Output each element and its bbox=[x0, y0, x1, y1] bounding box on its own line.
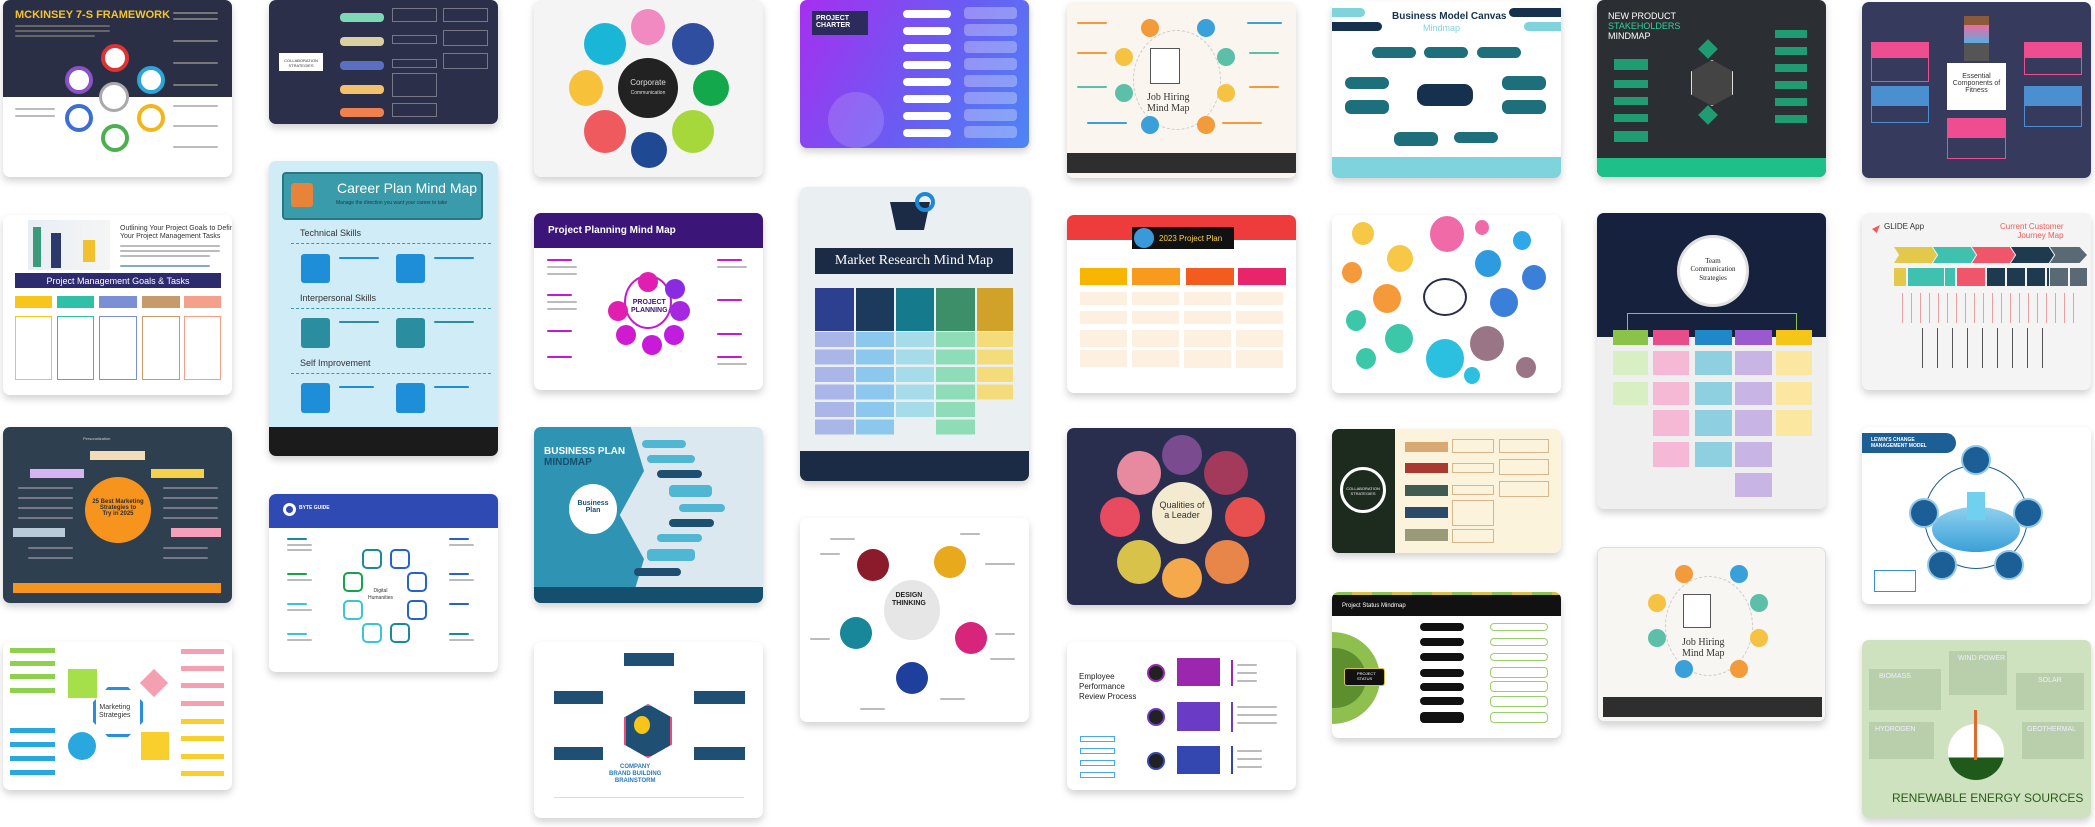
title bbox=[1608, 11, 1680, 41]
hex icons bbox=[362, 549, 382, 569]
card: Job hiring mind map bbox=[1067, 2, 1296, 178]
title bbox=[892, 592, 926, 607]
card: Business plan mindmap: Business bbox=[577, 500, 609, 507]
card: Byte guide digital humanities: BYTE GUIDE bbox=[299, 505, 330, 511]
title: THINKING bbox=[892, 600, 926, 607]
title: Job Hiring bbox=[1682, 637, 1724, 648]
title: Business Model Canvas bbox=[1392, 11, 1506, 22]
card: Project management goals bbox=[3, 215, 232, 395]
title bbox=[609, 764, 661, 784]
card: Renewable energy sources: WIND POWER bbox=[1958, 655, 2005, 662]
card: Career plan mind map: Technical Skills bbox=[300, 228, 361, 238]
center box bbox=[1947, 63, 2006, 110]
center circle bbox=[1423, 278, 1467, 316]
center circle: a Leader bbox=[1164, 510, 1200, 520]
card: Renewable energy sources: SOLAR bbox=[2038, 677, 2062, 684]
center label bbox=[99, 704, 131, 719]
card: Company brand building brainstorm bbox=[534, 642, 763, 818]
card: Renewable energy sources: BIOMASS bbox=[1879, 673, 1911, 680]
title: Mind Map bbox=[1147, 103, 1190, 114]
title: MINDMAP bbox=[1608, 31, 1650, 41]
card: Project charter bbox=[800, 0, 1029, 148]
title: Job Hiring bbox=[1147, 92, 1190, 103]
card: Employee performance review bbox=[1067, 642, 1296, 790]
card: Business plan mindmap bbox=[534, 427, 763, 603]
card: Market research mind map bbox=[800, 187, 1029, 481]
label boxes bbox=[90, 451, 145, 460]
card: Project status mindmap: STATUS bbox=[1357, 676, 1372, 681]
card: Collaboration strategies dark bbox=[269, 0, 498, 124]
center circle: Try in 2025 bbox=[102, 511, 134, 517]
card: Lewin's change management model: MANAGEMENT MODEL bbox=[1871, 443, 1927, 449]
card: Project status mindmap: PROJECT bbox=[1357, 671, 1376, 676]
card: Career plan mind map: Manage the direction you want your career to take bbox=[336, 200, 447, 206]
title: 2023 Project Plan bbox=[1159, 234, 1222, 243]
center box bbox=[279, 53, 323, 71]
card: Team communication strategies bbox=[1597, 213, 1826, 509]
center circle bbox=[1152, 482, 1212, 544]
banner bbox=[15, 273, 221, 288]
card: McKinsey 7-S framework bbox=[3, 0, 232, 177]
card: Marketing strategies 2025: Personalization bbox=[83, 436, 110, 441]
card: Employee performance review: Review Process bbox=[1079, 692, 1136, 701]
card: Lewin's change management model bbox=[1862, 427, 2091, 604]
center circle: Corporate bbox=[630, 78, 666, 87]
card: Customer journey map: Journey Map bbox=[2017, 231, 2064, 240]
card: Career plan mind map bbox=[269, 161, 498, 456]
banner bbox=[815, 248, 1013, 274]
title bbox=[812, 11, 868, 35]
center circle: Qualities of bbox=[1159, 500, 1205, 510]
title: PROJECT bbox=[816, 15, 849, 22]
center circle: Strategies to bbox=[100, 505, 136, 511]
title bbox=[1132, 227, 1234, 249]
card: Customer journey map bbox=[1862, 213, 2091, 390]
card: Byte guide digital humanities: Humanities bbox=[368, 594, 393, 600]
title: GLIDE App bbox=[1884, 222, 1924, 231]
center circle: 25 Best Marketing bbox=[92, 499, 144, 505]
card: Project planning mind map: PLANNING bbox=[631, 307, 668, 314]
title: NEW PRODUCT bbox=[1608, 11, 1676, 21]
center circle: COLLABORATION bbox=[1346, 486, 1380, 491]
title bbox=[544, 446, 625, 468]
card: Renewable energy sources bbox=[1862, 640, 2091, 818]
title: Project Status Mindmap bbox=[1342, 603, 1406, 609]
center circle: Communication bbox=[631, 90, 665, 96]
title: BRAND BUILDING bbox=[609, 771, 661, 777]
title: RENEWABLE ENERGY SOURCES bbox=[1892, 791, 2083, 805]
diagram: 7 circles bbox=[65, 44, 165, 152]
title bbox=[1682, 637, 1724, 659]
card: New product stakeholders bbox=[1597, 0, 1826, 177]
card: Project planning mind map bbox=[534, 213, 763, 390]
card: Business Model Canvas bbox=[1332, 2, 1561, 178]
card: 2023 project plan bbox=[1067, 215, 1296, 393]
title: Project Planning Mind Map bbox=[548, 225, 676, 236]
card: Project status mindmap bbox=[1332, 592, 1561, 738]
header bbox=[282, 172, 483, 220]
card: Renewable energy sources: GEOTHERMAL bbox=[2027, 726, 2076, 733]
card: Job hiring mind map 2 bbox=[1597, 547, 1826, 722]
card: Byte guide digital humanities bbox=[269, 494, 498, 672]
title bbox=[1147, 92, 1190, 114]
center label: Marketing bbox=[99, 704, 130, 711]
card: Collaboration strategies cream bbox=[1332, 429, 1561, 553]
card: Design thinking bbox=[800, 518, 1029, 722]
center box: Essential Components of Fitness bbox=[1953, 73, 2000, 94]
title: Team Communication Strategies bbox=[1690, 257, 1736, 282]
card: Byte guide digital humanities: Digital bbox=[374, 588, 387, 594]
card: Fitness components bbox=[1862, 2, 2091, 178]
center label: Strategies bbox=[99, 712, 131, 719]
banner: Project Management Goals & Tasks bbox=[47, 276, 189, 286]
title: BRAINSTORM bbox=[615, 778, 655, 784]
card: Renewable energy sources: HYDROGEN bbox=[1875, 726, 1915, 733]
title: STAKEHOLDERS bbox=[1608, 21, 1680, 31]
card: Marketing strategies 2025 bbox=[3, 427, 232, 603]
center circle bbox=[1340, 467, 1386, 513]
title: COMPANY bbox=[620, 764, 650, 770]
card: Business Model Canvas: Mindmap bbox=[1423, 23, 1460, 33]
card: Marketing strategies mind map bbox=[3, 642, 232, 790]
card: Employee performance review: Employee bbox=[1079, 672, 1115, 681]
title: MINDMAP bbox=[544, 457, 592, 468]
card: Career plan mind map: Interpersonal Skills bbox=[300, 293, 376, 303]
card: Customer journey map: Current Customer bbox=[2000, 222, 2064, 231]
banner: Market Research Mind Map bbox=[835, 253, 993, 268]
title: DESIGN bbox=[896, 592, 922, 599]
center circle: STRATEGIES bbox=[1350, 491, 1376, 496]
center box: COLLABORATION STRATEGIES bbox=[284, 58, 318, 68]
card: Qualities of a leader bbox=[1067, 428, 1296, 605]
card: Career plan mind map: Career Plan Mind Map bbox=[337, 180, 477, 196]
title: CHARTER bbox=[816, 22, 850, 29]
card: Corporate communication bbox=[534, 0, 763, 177]
card: Project planning mind map: PROJECT bbox=[633, 299, 666, 306]
center circle bbox=[85, 477, 151, 543]
card: Business plan mindmap: Plan bbox=[586, 507, 600, 514]
card: Project management goals: Your Project Management Tasks bbox=[120, 233, 220, 240]
card: Employee performance review: Performance bbox=[1079, 682, 1125, 691]
card: Career plan mind map: Self Improvement bbox=[300, 358, 371, 368]
card: Lewin's change management model: LEWIN'S CHANGE bbox=[1871, 437, 1915, 443]
title: Mind Map bbox=[1682, 648, 1724, 659]
card: Circles mind map bbox=[1332, 215, 1561, 393]
title: MCKINSEY 7-S FRAMEWORK bbox=[15, 9, 170, 21]
title: BUSINESS PLAN bbox=[544, 446, 625, 457]
center circle bbox=[618, 58, 678, 118]
